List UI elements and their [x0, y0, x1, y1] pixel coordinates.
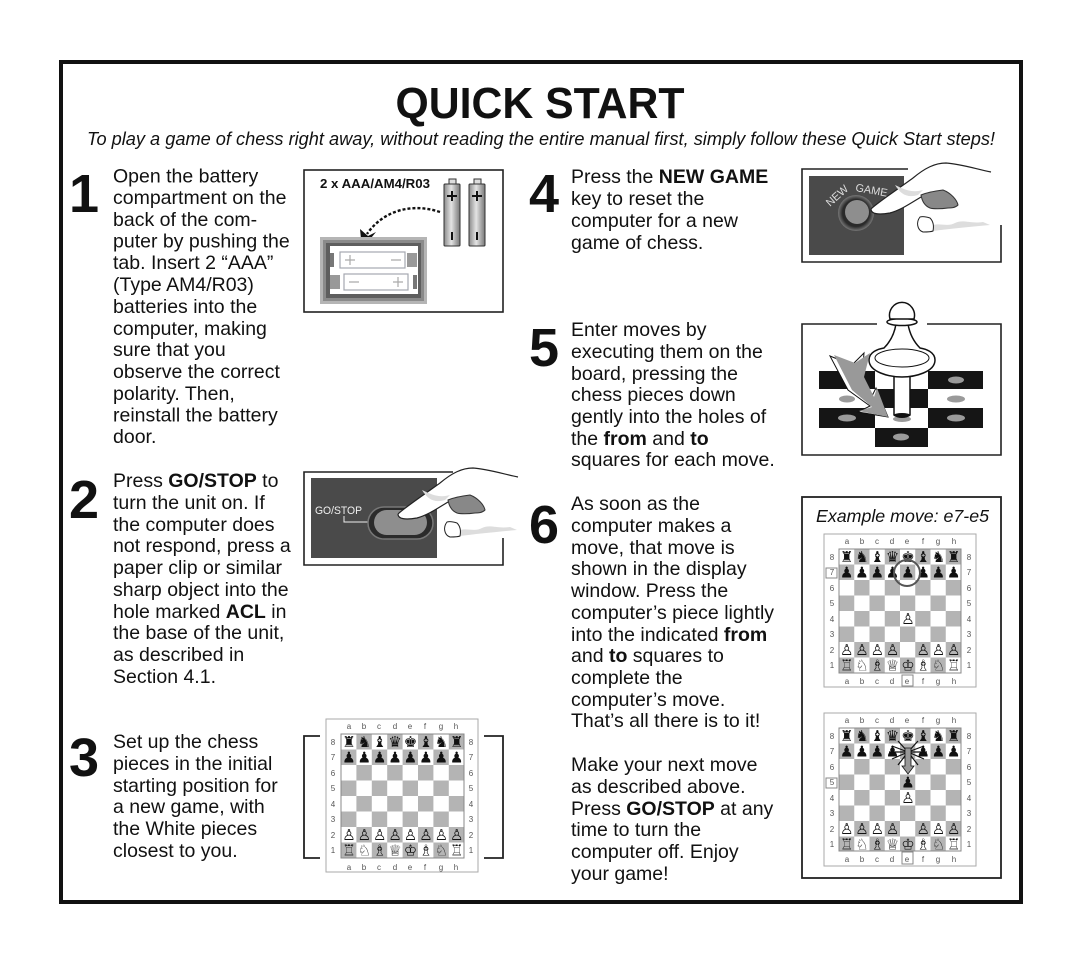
intro text: To play a game of chess right away, without reading the entire manual first, simply follow these Quick Start steps!: [87, 129, 995, 149]
chessboard: initial position: [326, 719, 478, 872]
pawn on board illustration: [802, 302, 1001, 455]
GO/STOP illustration: [304, 468, 518, 565]
chessboard: from square e7: 87654321: [967, 553, 972, 670]
step 6 text: complete the: [571, 667, 683, 689]
step 6 text: shown in the display: [571, 558, 747, 580]
step 6 text: Press GO/STOP at any: [571, 798, 773, 820]
chessboard: to square e5: abcdefgh: [845, 855, 956, 864]
step 1 text: tab. Insert 2 “AAA”: [113, 252, 273, 274]
chessboard: to square e5: ♟: [901, 774, 915, 792]
step 1 text: computer, making: [113, 318, 267, 340]
step 2 text: the base of the unit,: [113, 622, 284, 644]
step 2: [69, 470, 296, 688]
NEW GAME illustration: [802, 163, 1001, 262]
chessboard: from square e7: ♟♟♟♟♟♟♟♟: [840, 564, 960, 582]
step 1 text: back of the com-: [113, 209, 257, 231]
step 4 text: game of chess.: [571, 232, 703, 254]
step 5 text: gently into the holes of: [571, 406, 767, 428]
chessboard: from square e7: ♙: [901, 610, 915, 628]
brackets around board: [304, 736, 503, 858]
step 1 text: (Type AM4/R03): [113, 274, 254, 296]
chessboard: initial position: abcdefgh: [347, 722, 458, 731]
step 5: [529, 318, 775, 471]
GO/STOP label: GO/STOP: [315, 505, 362, 517]
step 3 text: the White pieces: [113, 818, 257, 840]
step 3 text: Set up the chess: [113, 731, 259, 753]
chessboard: initial position: ♙♙♙♙♙♙♙♙: [342, 826, 463, 844]
chessboard: initial position: 87654321: [331, 738, 336, 855]
step 3: [69, 728, 283, 862]
step 6 number: 6: [529, 495, 559, 555]
step 5 text: board, pressing the: [571, 363, 738, 385]
step 4 text: Press the NEW GAME: [571, 166, 768, 188]
step 6: [529, 493, 779, 885]
icon: hand pressing button: [871, 163, 991, 232]
arrow: press piece down: [830, 353, 888, 417]
chessboard: from square e7: [824, 534, 976, 687]
NEW GAME label: GAME: [854, 182, 888, 200]
arrow: insert batteries: [360, 208, 440, 249]
step 2 text: Press GO/STOP to: [113, 470, 278, 492]
step 2 text: Section 4.1.: [113, 666, 216, 688]
step 1 text: sure that you: [113, 339, 226, 361]
NEW GAME label: [824, 182, 888, 209]
step 2 text: paper clip or similar: [113, 557, 283, 579]
chessboard: to square e5: [824, 713, 976, 866]
step 5 text: the from and to: [571, 428, 709, 450]
chessboard: from square e7: ♙♙♙♙♙♙♙: [840, 641, 960, 659]
step 1 text: door.: [113, 426, 156, 448]
step 5 text: chess pieces down: [571, 384, 736, 406]
chessboard: initial position: ♟♟♟♟♟♟♟♟: [342, 748, 463, 766]
chessboard: initial position: abcdefgh: [347, 863, 458, 872]
step 1 text: reinstall the battery: [113, 404, 278, 426]
step 6 text: Make your next move: [571, 754, 757, 776]
dark key panel: [311, 478, 437, 558]
step 6 text: computer off. Enjoy: [571, 841, 739, 863]
step 4: [529, 164, 774, 254]
step 6 text: computer’s piece lightly: [571, 602, 774, 624]
step 3 number: 3: [69, 728, 99, 788]
step 5 text: squares for each move.: [571, 449, 775, 471]
step 6 text: window. Press the: [570, 580, 728, 602]
example move panel: [802, 497, 1001, 878]
step 2 text: turn the unit on. If: [113, 492, 265, 514]
battery compartment: [320, 237, 427, 304]
step 6 text: your game!: [571, 863, 669, 885]
chessboard: to square e5: ♟♟♟♟♟♟♟: [840, 742, 960, 760]
dark key panel: [809, 176, 904, 255]
outer frame: [61, 62, 1021, 902]
chessboard: to square e5: ♜♞♝♛♚♝♞♜: [840, 727, 960, 745]
chessboard: from square e7: ♜♞♝♛♚♝♞♜: [840, 548, 960, 566]
step 1 text: compartment on the: [113, 187, 286, 209]
step 2 text: the computer does: [113, 514, 275, 536]
chessboard: from square e7: 87654321: [830, 553, 835, 670]
step 1 text: puter by pushing the: [113, 230, 290, 252]
step 1 text: Open the battery: [113, 166, 259, 188]
step 1: [69, 164, 295, 448]
step 4 text: key to reset the: [571, 188, 704, 210]
example move heading: Example move: e7-e5: [816, 506, 989, 526]
step 6 text: As soon as the: [571, 493, 700, 515]
chessboard: initial position: ♜♞♝♛♚♝♞♜: [342, 733, 463, 751]
arrow: burst moving e7 to e5: [889, 741, 927, 774]
icon: hand pressing button: [398, 468, 518, 537]
step 1 text: observe the correct: [113, 361, 280, 383]
step 6 text: move, that move is: [571, 537, 735, 559]
step 6 text: and to squares to: [571, 645, 724, 667]
title: QUICK START: [396, 79, 685, 128]
chessboard: from square e7: ♖♘♗♕♔♗♘♖: [840, 656, 960, 674]
battery illustration: [304, 170, 503, 312]
step 6 text: into the indicated from: [571, 624, 767, 646]
step 5 text: Enter moves by: [571, 319, 707, 341]
chessboard: to square e5: ♙♙♙♙♙♙♙: [840, 820, 960, 838]
chessboard: to square e5: ♙: [901, 789, 915, 807]
step 2 text: sharp object into the: [113, 579, 289, 601]
step 3 text: closest to you.: [113, 840, 238, 862]
step 6 text: computer’s move.: [571, 689, 725, 711]
step 1 text: batteries into the: [113, 296, 257, 318]
step 6 text: time to turn the: [571, 819, 701, 841]
battery label: 2 x AAA/AM4/R03: [320, 176, 430, 191]
step 2 text: hole marked ACL in: [113, 601, 286, 623]
chessboard: to square e5: 87654321: [830, 732, 835, 849]
step 5 number: 5: [529, 318, 559, 378]
chessboard: initial position: 87654321: [469, 738, 474, 855]
chessboard: from square e7: abcdefgh: [845, 537, 956, 546]
step 3 text: pieces in the initial: [113, 753, 272, 775]
step 6 text: That’s all there is to it!: [571, 710, 760, 732]
chessboard: to square e5: abcdefgh: [845, 716, 956, 725]
step 4 text: computer for a new: [571, 210, 739, 232]
icon: pawn: [869, 302, 935, 417]
step 6 text: computer makes a: [571, 515, 732, 537]
chessboard: initial position: ♖♘♗♕♔♗♘♖: [342, 842, 463, 860]
NEW GAME button: [838, 195, 874, 231]
step 1 number: 1: [69, 164, 99, 224]
step 3 text: a new game, with: [113, 796, 265, 818]
step 2 text: not respond, press a: [113, 535, 291, 557]
icon: two batteries: [444, 179, 485, 246]
step 2 number: 2: [69, 470, 99, 530]
step 1 text: polarity. Then,: [113, 383, 235, 405]
GO/STOP button: [368, 507, 433, 539]
chessboard: to square e5: ♖♘♗♕♔♗♘♖: [840, 836, 960, 854]
chessboard: from square e7: abcdefgh: [845, 677, 956, 686]
step 5 text: executing them on the: [571, 341, 763, 363]
NEW GAME label: NEW: [824, 183, 852, 209]
step 4 number: 4: [529, 164, 559, 224]
checkered board: [819, 371, 983, 447]
step 6 text: as described above.: [571, 776, 746, 798]
step 3 text: starting position for: [113, 775, 278, 797]
step 2 text: as described in: [113, 644, 244, 666]
chessboard: to square e5: 87654321: [967, 732, 972, 849]
highlight circle on e7: [894, 560, 920, 586]
